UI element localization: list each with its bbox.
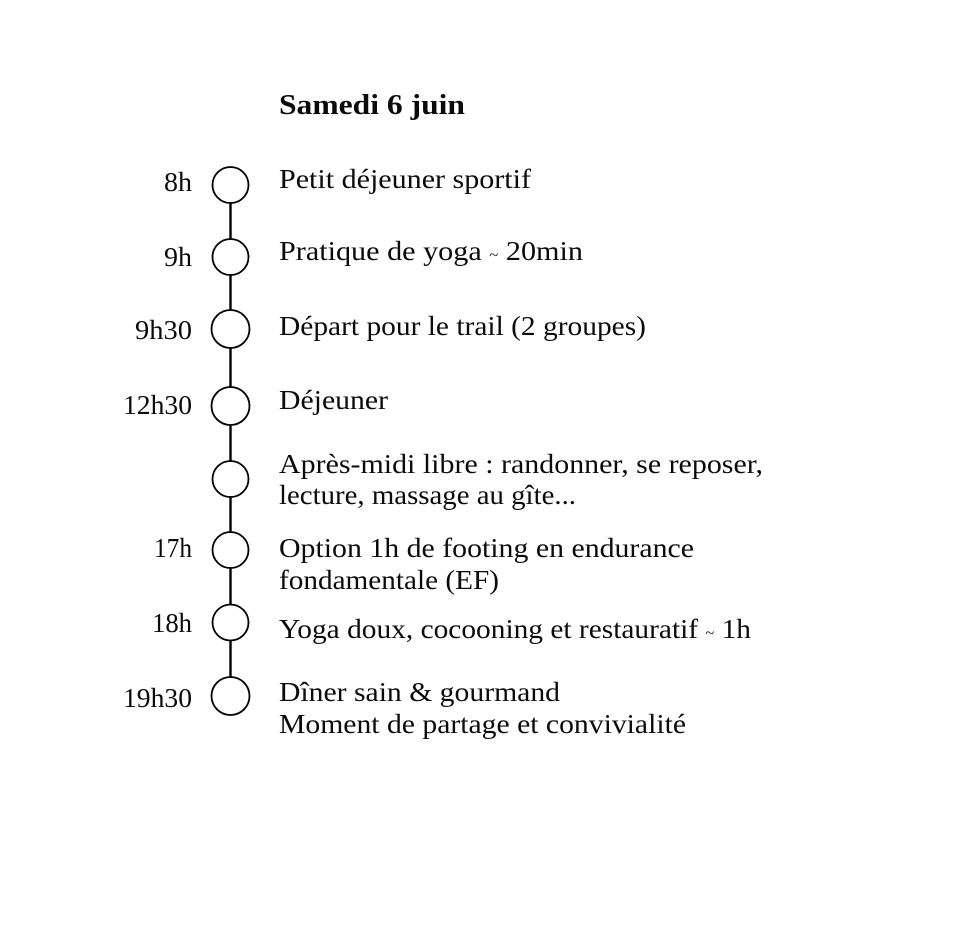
timeline marker 9h30 [212,310,250,348]
timeline marker 17h [212,532,248,568]
timeline marker 8h [212,167,248,203]
activities [279,164,763,739]
time 12h30: 12h30 [123,390,192,420]
timeline marker 19h30 [212,677,250,715]
activity yoga: Pratique de yoga ~ 20min [279,236,584,266]
activity gentle yoga: Yoga doux, cocooning et restauratif ~ 1h [279,614,752,644]
time labels [123,167,193,713]
time 9h30: 9h30 [135,315,192,345]
activity dinner: Moment de partage et convivialité [279,709,686,739]
time 19h30: 19h30 [123,683,192,713]
timeline marker 12h30 [212,387,250,425]
timeline marker afternoon [212,461,248,497]
activity breakfast: Petit déjeuner sportif [279,164,531,194]
timeline [212,167,250,715]
activity lunch: Déjeuner [279,385,388,415]
title: Samedi 6 juin [279,90,465,121]
activity trail: Départ pour le trail (2 groupes) [279,311,646,341]
activity free afternoon: Après-midi libre : randonner, se reposer, [279,449,763,479]
timeline marker 18h [212,604,248,640]
activity dinner [279,677,686,739]
activity free afternoon [279,449,763,510]
activity footing: Option 1h de footing en endurance [279,533,694,563]
activity footing [279,533,694,595]
time 8h: 8h [164,167,193,197]
time 9h: 9h [164,242,193,272]
activity dinner: Dîner sain & gourmand [279,677,561,707]
time 18h: 18h [152,608,192,638]
activity footing: fondamentale (EF) [279,565,499,595]
activity free afternoon: lecture, massage au gîte... [279,480,576,510]
timeline connector line [229,185,232,696]
time 17h: 17h [154,533,192,563]
timeline marker 9h [212,239,248,275]
